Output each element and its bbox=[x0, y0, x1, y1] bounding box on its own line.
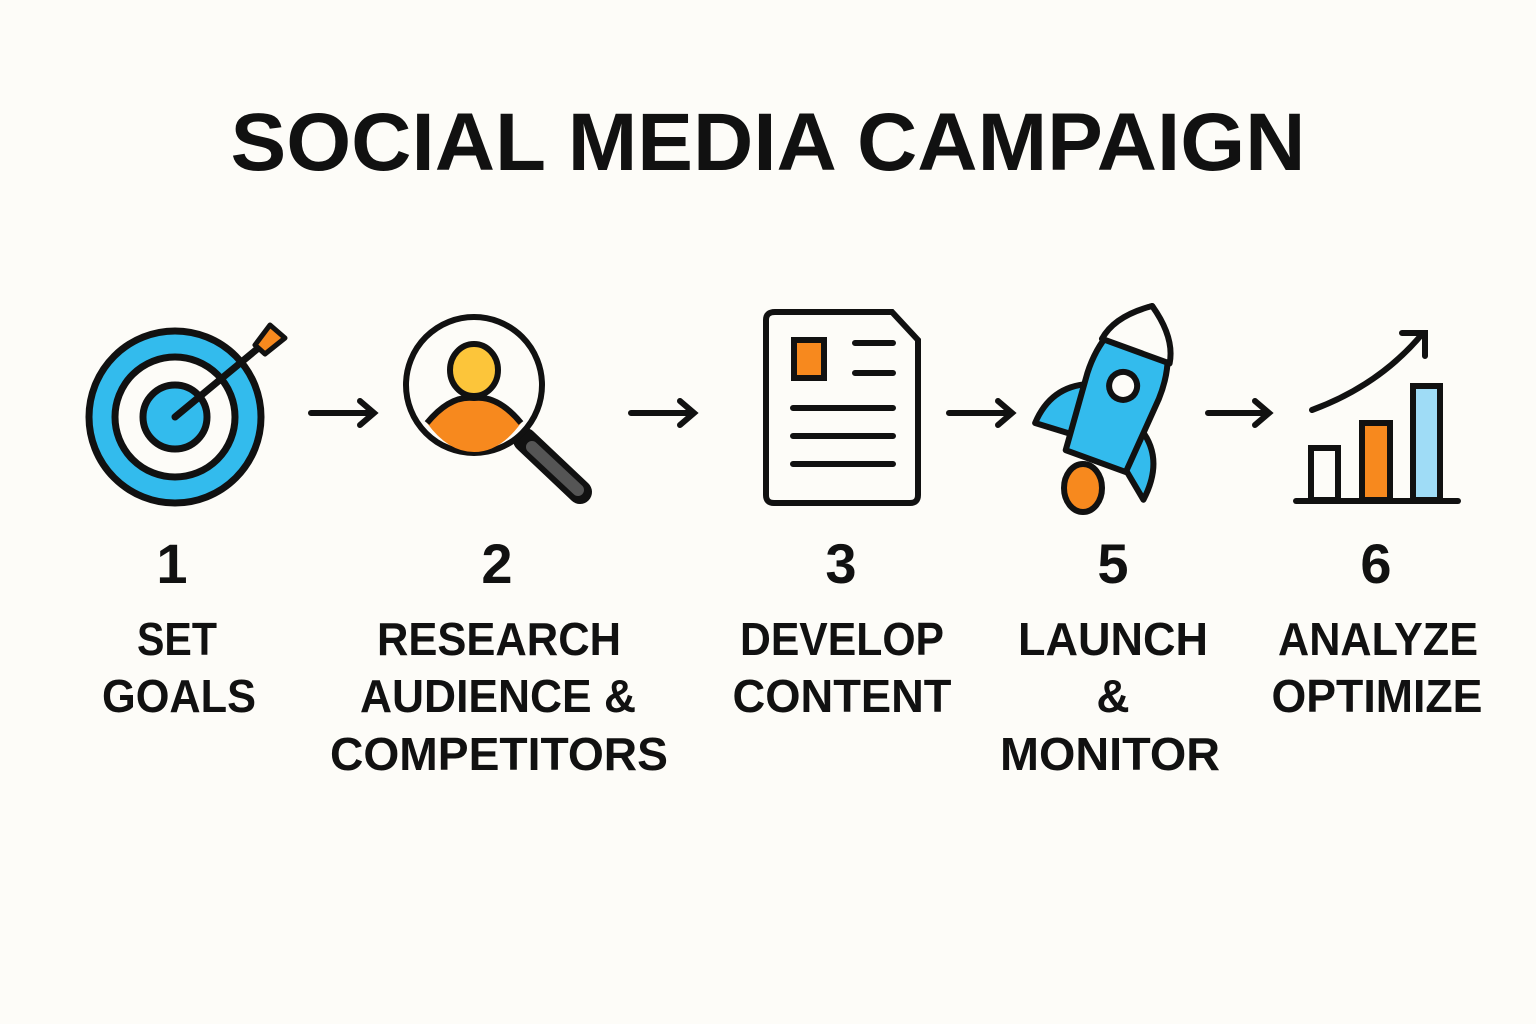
step 3: 3 bbox=[825, 532, 857, 595]
step 1 bbox=[102, 532, 256, 722]
step 6: ANALYZE bbox=[1278, 613, 1478, 665]
step 2: COMPETITORS bbox=[330, 728, 668, 780]
step 5: & bbox=[1096, 670, 1130, 722]
icon: target bbox=[89, 325, 285, 503]
step 3: DEVELOP bbox=[740, 613, 944, 665]
step 6: OPTIMIZE bbox=[1272, 670, 1482, 722]
step 5: LAUNCH bbox=[1018, 613, 1208, 665]
arrow 2 bbox=[631, 401, 694, 425]
step 2: 2 bbox=[481, 532, 513, 595]
icon: document bbox=[766, 312, 918, 503]
step 6 bbox=[1272, 532, 1482, 722]
step 2: RESEARCH bbox=[377, 613, 621, 665]
icon: bar chart with trend arrow bbox=[1296, 333, 1458, 501]
step 6: 6 bbox=[1360, 532, 1392, 595]
arrow 1 bbox=[311, 401, 374, 425]
arrow 3 bbox=[949, 401, 1012, 425]
icon: magnifier with person bbox=[406, 317, 580, 492]
arrow 4 bbox=[1208, 401, 1269, 425]
step 5 bbox=[1000, 532, 1220, 780]
step 5: 5 bbox=[1097, 532, 1129, 595]
step 2: AUDIENCE & bbox=[360, 670, 636, 722]
icon: rocket bbox=[1023, 282, 1208, 512]
step 1: SET bbox=[137, 613, 217, 665]
step 5: MONITOR bbox=[1000, 728, 1220, 780]
step 1: 1 bbox=[156, 532, 188, 595]
step 2 bbox=[330, 532, 668, 780]
title: SOCIAL MEDIA CAMPAIGN bbox=[230, 97, 1306, 188]
step 1: GOALS bbox=[102, 670, 256, 722]
step 3 bbox=[732, 532, 952, 722]
step 3: CONTENT bbox=[732, 670, 952, 722]
